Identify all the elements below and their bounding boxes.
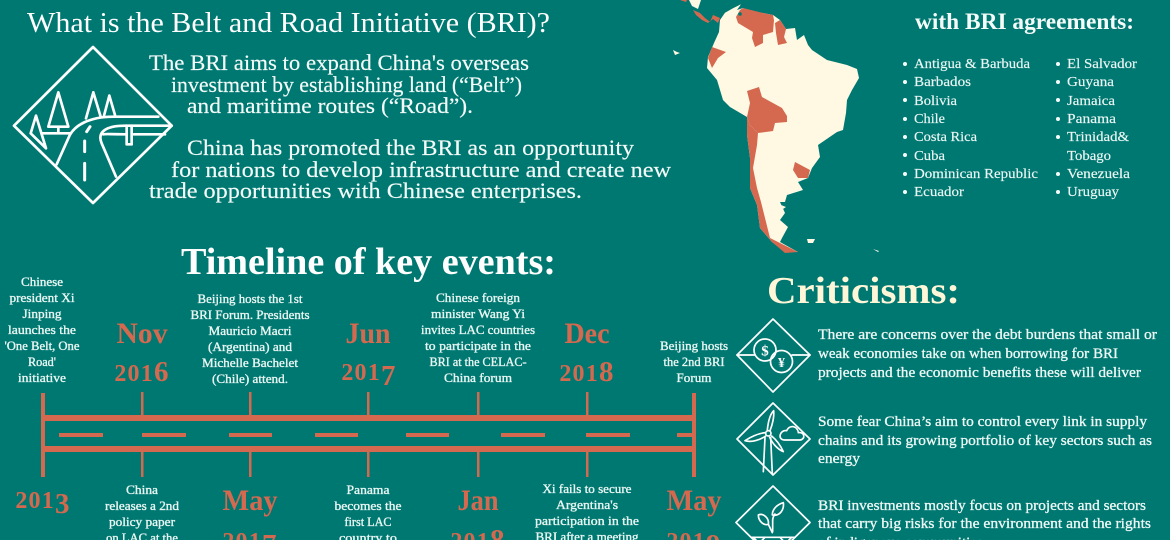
list: countries column two: Venezuela <box>1067 167 1131 182</box>
event: May 2019: Beijing hosts <box>660 339 728 353</box>
event: Nov 2016: policy paper <box>109 515 176 529</box>
list: countries column one: Dominican Republic <box>914 167 1038 182</box>
event: May 2017: Beijing hosts the 1st <box>198 292 303 306</box>
event: Jun 2017: becomes the <box>334 499 402 513</box>
event: 2013: president Xi <box>10 291 75 305</box>
event: 2013: initiative <box>18 371 66 385</box>
icon: plant diamond <box>736 486 810 540</box>
event: Jan 2018: to participate in the <box>425 339 531 353</box>
event: Jun 2017: 201 <box>341 360 381 386</box>
event: 2013: 'One Belt, One <box>4 339 80 353</box>
heading: countries with BRI agreements: with BRI agreements: <box>915 9 1134 34</box>
event: May 2017: Mauricio Macri <box>208 324 292 338</box>
icon: currency diamond <box>737 319 810 392</box>
event: Jan 2018: invites LAC countries <box>421 323 535 337</box>
list: countries column one: Ecuador <box>914 185 964 200</box>
title: what is the BRI: What is the Belt and Road Initiative (BRI)? <box>27 7 550 39</box>
event: Jun 2017: first LAC <box>344 515 392 529</box>
list: countries column one: Costa Rica <box>914 130 978 145</box>
text block: supply chain criticism: energy <box>818 451 861 467</box>
list: countries column two: Tobago <box>1067 149 1111 164</box>
text block: debt burden criticism <box>818 327 1157 381</box>
event: Dec 2018 <box>535 317 639 540</box>
text block: supply chain criticism: Some fear China’s aim to control every link in supply <box>818 414 1148 430</box>
map: South America with BRI countries <box>673 0 879 253</box>
event: May 2019 <box>660 339 728 540</box>
event: May 2017: BRI Forum. Presidents <box>190 308 310 322</box>
event: Nov 2016 <box>105 317 180 540</box>
heading: timeline of key events: Timeline of key events: <box>181 241 556 283</box>
list: countries column two: Uruguay <box>1067 185 1119 200</box>
event: Jun 2017: Jun <box>346 317 391 350</box>
event: Jan 2018: minister Wang Yi <box>431 307 526 321</box>
icon: currency diamond: $ <box>761 344 769 360</box>
list: countries column one: Antigua & Barbuda <box>914 57 1031 72</box>
text block: BRI introduction: The BRI aims to expand China's overseas <box>149 50 529 75</box>
text block: BRI introduction: for nations to develop infrastructure and create new <box>171 157 671 182</box>
list: countries column one: Chile <box>914 112 945 127</box>
list: countries column one: Barbados <box>914 75 971 90</box>
icon: currency diamond: ¥ <box>778 356 785 371</box>
timeline road graphic <box>41 392 696 477</box>
event: Jan 2018: Chinese foreign <box>436 291 521 305</box>
event: 2013: Jinping <box>22 307 62 321</box>
event: Jan 2018: BRI at the CELAC- <box>430 355 526 369</box>
event: May 2019: the 2nd BRI <box>664 355 724 369</box>
event: Jan 2018 <box>421 291 535 540</box>
text block: debt burden criticism: There are concerns over the debt burdens that small or <box>818 327 1157 343</box>
heading: criticisms: Criticisms: <box>767 270 960 312</box>
event: May 2017: (Chile) attend. <box>212 372 288 386</box>
text block: environment criticism: BRI investments mostly focus on projects and sectors <box>818 498 1146 514</box>
list: countries column two: Trinidad& <box>1067 130 1129 145</box>
list: countries column two: Panama <box>1067 112 1117 127</box>
list: countries column one: Cuba <box>914 149 946 164</box>
list: countries column two: El Salvador <box>1067 57 1137 72</box>
event: May 2019: May <box>666 484 722 517</box>
event: Dec 2018: 2018 <box>559 356 615 388</box>
event: Dec 2018: Dec <box>564 317 610 350</box>
event: May 2017: Michelle Bachelet <box>202 356 299 370</box>
event: Nov 2016: 2016 <box>114 356 170 388</box>
event: 2013: 3 <box>55 488 71 520</box>
event: Jun 2017: 7 <box>381 360 397 392</box>
text block: debt burden criticism: projects and the economic benefits these will deliver <box>818 365 1141 381</box>
text block: BRI introduction <box>149 50 671 203</box>
text block: debt burden criticism: weak economies take on when borrowing for BRI <box>818 346 1118 362</box>
list: countries column one <box>903 57 1038 200</box>
event: Jun 2017: Panama <box>346 483 390 497</box>
text block: BRI introduction: investment by establishing land (“Belt”) <box>171 72 522 97</box>
list: countries column two: Guyana <box>1067 75 1115 90</box>
event: Nov 2016: Nov <box>116 317 168 350</box>
event: 2013: Road' <box>28 355 56 369</box>
text block: BRI introduction: trade opportunities with Chinese enterprises. <box>149 178 582 203</box>
event: Nov 2016: China <box>126 483 158 497</box>
event: 2013: Chinese <box>21 275 63 289</box>
event: Jun 2017 <box>334 317 402 540</box>
event: 2013 <box>4 275 80 520</box>
event: Jan 2018: Jan <box>458 484 499 517</box>
list: countries column one: Bolivia <box>914 94 958 109</box>
event: 2013: launches the <box>8 323 76 337</box>
event: Dec 2018: Argentina's <box>556 498 618 512</box>
event: May 2017: (Argentina) and <box>208 340 293 354</box>
event: Dec 2018: Xi fails to secure <box>542 482 632 496</box>
event: Dec 2018: participation in the <box>535 514 639 528</box>
icon: wind turbine diamond <box>737 403 810 475</box>
event: May 2019: Forum <box>676 371 712 385</box>
text block: BRI introduction: and maritime routes (“Road”). <box>187 93 473 118</box>
event: Jan 2018: China forum <box>444 371 512 385</box>
text block: supply chain criticism <box>818 414 1152 467</box>
event: Nov 2016: releases a 2nd <box>105 499 180 513</box>
event: May 2017 <box>190 292 310 540</box>
list: countries column two <box>1056 57 1137 200</box>
text block: supply chain criticism: chains and its growing portfolio of key sectors such as <box>818 433 1152 449</box>
text block: BRI introduction: China has promoted the BRI as an opportunity <box>187 135 634 160</box>
text block: environment criticism: that carry big risks for the environment and the rights <box>818 516 1151 532</box>
text block: environment criticism <box>818 498 1151 540</box>
event: 2013: 201 <box>15 488 55 514</box>
list: countries column two: Jamaica <box>1067 94 1116 109</box>
event: May 2017: May <box>222 484 278 517</box>
icon: road and trees diamond <box>14 47 172 203</box>
